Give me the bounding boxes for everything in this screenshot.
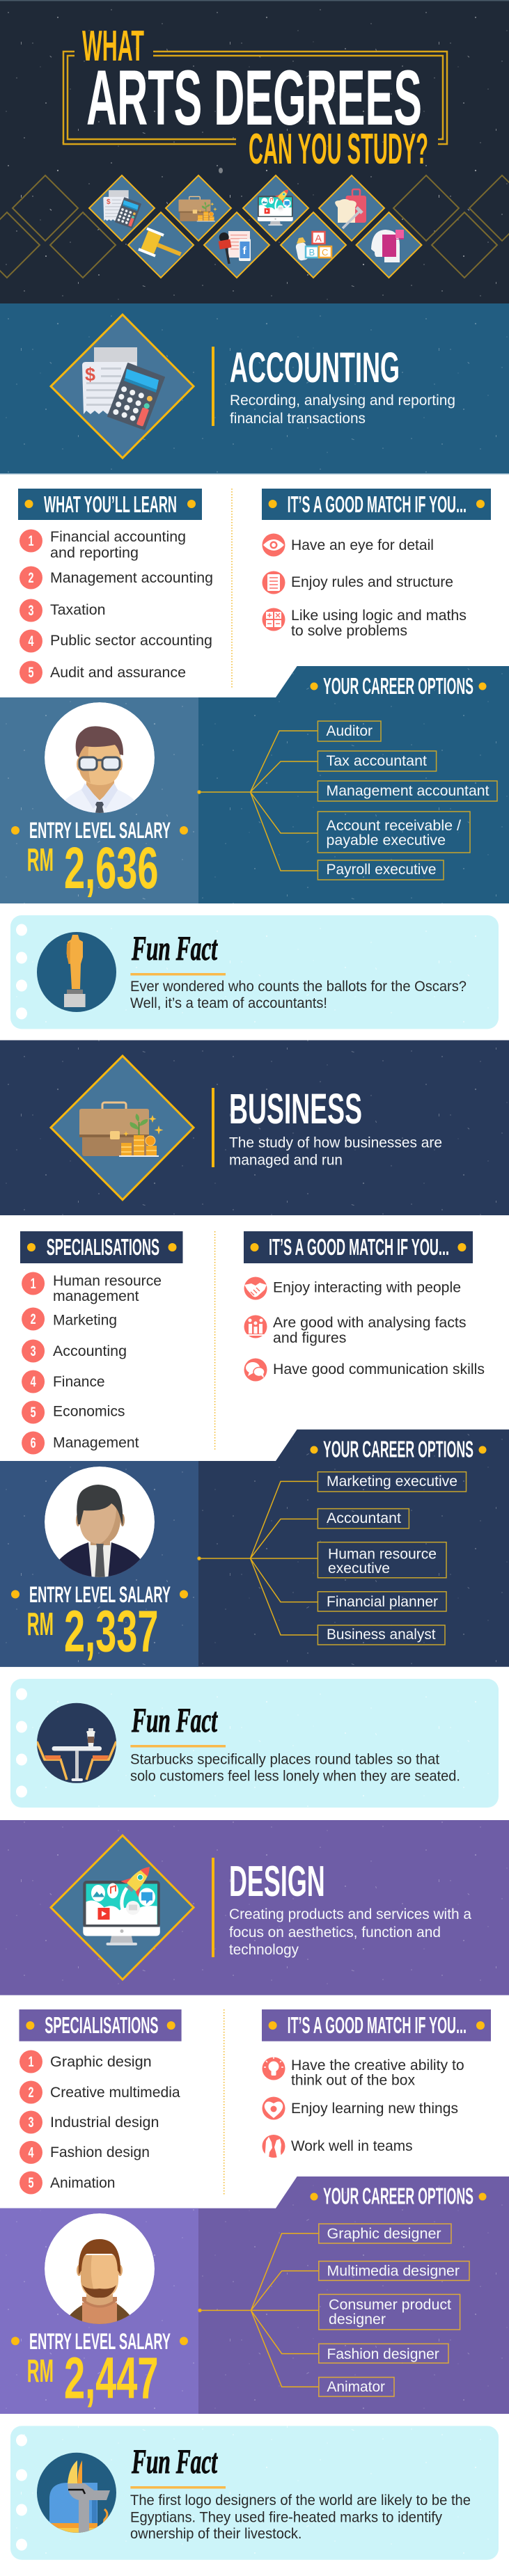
fun fact card: accounting [10, 915, 499, 1029]
description [229, 1906, 471, 1958]
list item 3: Accounting [53, 1343, 127, 1359]
list item 3 [19, 2110, 159, 2134]
fact text: The first logo designers of the world are likely to be the [130, 2492, 471, 2508]
match item: Enjoy rules and structure [291, 574, 453, 590]
list item 6: 6 [31, 1435, 36, 1451]
list item 4: 4 [31, 1374, 36, 1390]
diamond: early education: A [315, 232, 322, 244]
description: financial transactions [230, 411, 366, 427]
list item 5 [19, 2172, 116, 2194]
salary figure [27, 1599, 159, 1664]
list item 1: Human resource [53, 1273, 162, 1289]
career boxes: Graphic designer [327, 2226, 441, 2242]
diamond: psychology [357, 212, 422, 278]
list item 5 [22, 1400, 125, 1424]
match item [273, 1315, 467, 1346]
list item 2 [19, 567, 213, 589]
list item 4: 4 [28, 633, 34, 649]
salary figure: RM [27, 841, 54, 878]
icon: round table and chairs [37, 1703, 116, 1783]
fact text: ownership of their livestock. [130, 2526, 302, 2542]
panel: specialisations design: SPECIALISATIONS [45, 2012, 159, 2038]
list item 4 [22, 1370, 105, 1393]
match item [291, 2057, 464, 2089]
diamond: design [243, 175, 308, 241]
hero banner [0, 0, 509, 303]
icon: heart [262, 2096, 285, 2120]
list item 3: 3 [31, 1343, 36, 1359]
career boxes [318, 721, 497, 880]
list item 2: Creative multimedia [50, 2085, 180, 2101]
panel: salary [0, 697, 198, 903]
icon: handshake [244, 1277, 267, 1300]
label: entry level salary: ENTRY LEVEL SALARY [29, 2329, 171, 2354]
diamond: law [128, 212, 194, 278]
list item 5: Economics [53, 1403, 125, 1420]
fact text: solo customers feel less lonely when they are seated. [130, 1769, 460, 1785]
section header: accounting [0, 303, 509, 475]
panel: specialisations business: SPECIALISATIONS [47, 1234, 159, 1260]
career boxes: designer [329, 2312, 386, 2328]
panel: salary [0, 1461, 198, 1667]
fact text [130, 2492, 471, 2542]
diamond: early education: C [322, 247, 328, 258]
title frame [63, 52, 447, 144]
portrait: accountant [45, 702, 155, 816]
panel: salary [0, 2208, 198, 2414]
match item: to solve problems [291, 623, 407, 639]
list item 4: 4 [28, 2144, 34, 2160]
icon: calculator diamond: $ [85, 364, 95, 385]
portrait: business person [45, 1467, 155, 1580]
icon: eye [262, 533, 285, 557]
list item 4: Fashion design [50, 2144, 150, 2160]
list item 1: Graphic design [50, 2054, 152, 2070]
list item 1: and reporting [50, 545, 139, 561]
list item 6: Management [53, 1435, 139, 1451]
career boxes: Marketing executive [327, 1473, 457, 1490]
list item 1: Financial accounting [50, 529, 186, 545]
connector tree [198, 2234, 319, 2387]
panel: accounting career band [0, 666, 509, 903]
fact text [130, 979, 467, 1011]
fact text: Egyptians. They used fire-heated marks to identify [130, 2509, 442, 2525]
match item: Like using logic and maths [291, 608, 467, 624]
match item: Have an eye for detail [291, 537, 434, 553]
description: focus on aesthetics, function and [229, 1925, 441, 1941]
list item 5: 5 [28, 2175, 34, 2191]
panel: specialisations business [20, 1231, 182, 1455]
diamond: early education: B [309, 247, 315, 258]
diamond: media [204, 212, 269, 278]
list item 4 [19, 629, 212, 653]
diamond: media: f [242, 245, 246, 257]
list item 2: 2 [31, 1311, 36, 1327]
description [230, 393, 455, 427]
diamond: early education [281, 212, 346, 278]
list item 2 [19, 2081, 180, 2103]
match item: Enjoy interacting with people [273, 1279, 461, 1296]
list item 4: Finance [53, 1374, 105, 1390]
icon: maths [262, 608, 285, 631]
salary figure: RM [27, 1606, 54, 1642]
match item: Are good with analysing facts [273, 1315, 467, 1331]
list item 5: 5 [28, 665, 34, 681]
diamond: business [166, 175, 231, 241]
description: managed and run [229, 1153, 343, 1169]
career boxes: Business analyst [327, 1627, 436, 1643]
list item 1: management [53, 1288, 139, 1304]
match item: Work well in teams [291, 2138, 412, 2154]
salary figure: 2,636 [64, 835, 159, 901]
icon: speech bubbles [244, 1359, 267, 1381]
career boxes: Multimedia designer [327, 2263, 460, 2279]
list item 1 [22, 1272, 162, 1304]
description [229, 1135, 442, 1169]
icon: briefcase diamond [51, 1056, 194, 1200]
career boxes: Consumer product [329, 2297, 451, 2313]
list item 3: 3 [28, 603, 33, 619]
section header: business [0, 1040, 509, 1215]
salary figure: 2,337 [64, 1599, 159, 1664]
match item [291, 608, 467, 639]
fact text [130, 1752, 460, 1785]
icon: light bulb [262, 2057, 285, 2080]
list item 2: Marketing [53, 1313, 117, 1329]
career boxes [319, 2224, 469, 2396]
list item 2: 2 [28, 570, 33, 586]
list item 4: Public sector accounting [50, 633, 212, 649]
connector tree [198, 731, 318, 871]
icon: oscar statuette [37, 932, 116, 1012]
list item 1: 1 [31, 1276, 36, 1292]
section header: design [0, 1820, 509, 1995]
list item 5: Audit and assurance [50, 665, 186, 681]
panel: design career band [0, 2176, 509, 2414]
panel: good match accounting [262, 489, 491, 639]
heading: business: BUSINESS [229, 1085, 362, 1132]
list item 2: 2 [28, 2085, 33, 2101]
icon: charts [244, 1315, 267, 1338]
career boxes [318, 1472, 467, 1645]
list item 1 [19, 529, 186, 561]
list item 1: 1 [28, 533, 34, 549]
career boxes: Tax accountant [326, 753, 427, 769]
career boxes: executive [328, 1560, 390, 1577]
career boxes: Accountant [327, 1510, 401, 1526]
career boxes: Human resource [328, 1546, 437, 1562]
icon: anubis [37, 2453, 116, 2534]
salary figure: 2,447 [64, 2346, 159, 2411]
heading: fun fact: Fun Fact [131, 1700, 218, 1739]
list item 2 [22, 1307, 117, 1331]
icon: monitor diamond [51, 1835, 194, 1980]
match item: Have the creative ability to [291, 2057, 464, 2073]
list item 4 [19, 2141, 150, 2164]
heading: fun fact: Fun Fact [131, 2442, 218, 2481]
fact text: Ever wondered who counts the ballots for the Oscars? [130, 979, 467, 995]
panel: specialisations design [19, 2009, 182, 2194]
decorative outline diamonds [0, 175, 509, 278]
description: Creating products and services with a [229, 1906, 471, 1922]
career boxes: Animator [327, 2379, 385, 2395]
icon: rules document [262, 571, 285, 594]
icon: calculator diamond [51, 315, 194, 458]
match item: Enjoy learning new things [291, 2101, 458, 2117]
description: The study of how businesses are [229, 1135, 442, 1151]
panel: what you'll learn: WHAT YOU’LL LEARN [44, 491, 177, 517]
career boxes: Payroll executive [326, 862, 436, 878]
hero banner: WHAT [82, 22, 144, 70]
career boxes: Financial planner [327, 1594, 438, 1610]
career boxes: Management accountant [326, 783, 490, 799]
list item 3 [19, 599, 106, 622]
list item 5: Animation [50, 2175, 116, 2191]
description: Recording, analysing and reporting [230, 393, 455, 409]
match item: think out of the box [291, 2073, 415, 2089]
panel: what you'll learn [18, 489, 213, 683]
match item: and figures [273, 1330, 346, 1346]
description: technology [229, 1942, 299, 1958]
label: entry level salary: ENTRY LEVEL SALARY [29, 1582, 171, 1607]
list item 3: 3 [28, 2115, 33, 2131]
salary figure [27, 835, 159, 901]
icon: high five hands [262, 2135, 285, 2158]
diamond: accounting: $ [107, 198, 111, 206]
fact text: Starbucks specifically places round tables so that [130, 1752, 439, 1768]
fun fact card: business [10, 1679, 499, 1808]
panel: good match business [244, 1231, 485, 1381]
list item 1: 1 [28, 2054, 34, 2070]
list item 3: Industrial design [50, 2115, 159, 2131]
list item 5: 5 [31, 1405, 36, 1421]
career boxes: Account receivable / [326, 818, 461, 834]
heading: design: DESIGN [229, 1858, 325, 1906]
career boxes: payable executive [326, 832, 446, 848]
label: entry level salary: ENTRY LEVEL SALARY [29, 818, 171, 843]
fun fact card: design [10, 2426, 499, 2560]
fact text: Well, it’s a team of accountants! [130, 995, 327, 1011]
career boxes: Fashion designer [327, 2346, 439, 2362]
panel: good match design [262, 2009, 491, 2158]
portrait: designer [45, 2213, 155, 2326]
career boxes: Auditor [326, 723, 373, 739]
list item 3 [22, 1339, 127, 1363]
heading: fun fact: Fun Fact [131, 929, 218, 967]
panel: business career band [0, 1430, 509, 1667]
match item: Have good communication skills [273, 1361, 485, 1377]
salary figure: RM [27, 2353, 54, 2389]
diamond: hospitality [319, 175, 384, 241]
connector tree [198, 1481, 318, 1635]
diamond: accounting [89, 175, 155, 241]
list item 3: Taxation [50, 602, 106, 618]
list item 2: Management accounting [50, 570, 213, 586]
salary figure [27, 2346, 159, 2411]
list item 5 [19, 661, 186, 683]
list item 6 [22, 1431, 139, 1455]
list item 1 [19, 2050, 152, 2073]
